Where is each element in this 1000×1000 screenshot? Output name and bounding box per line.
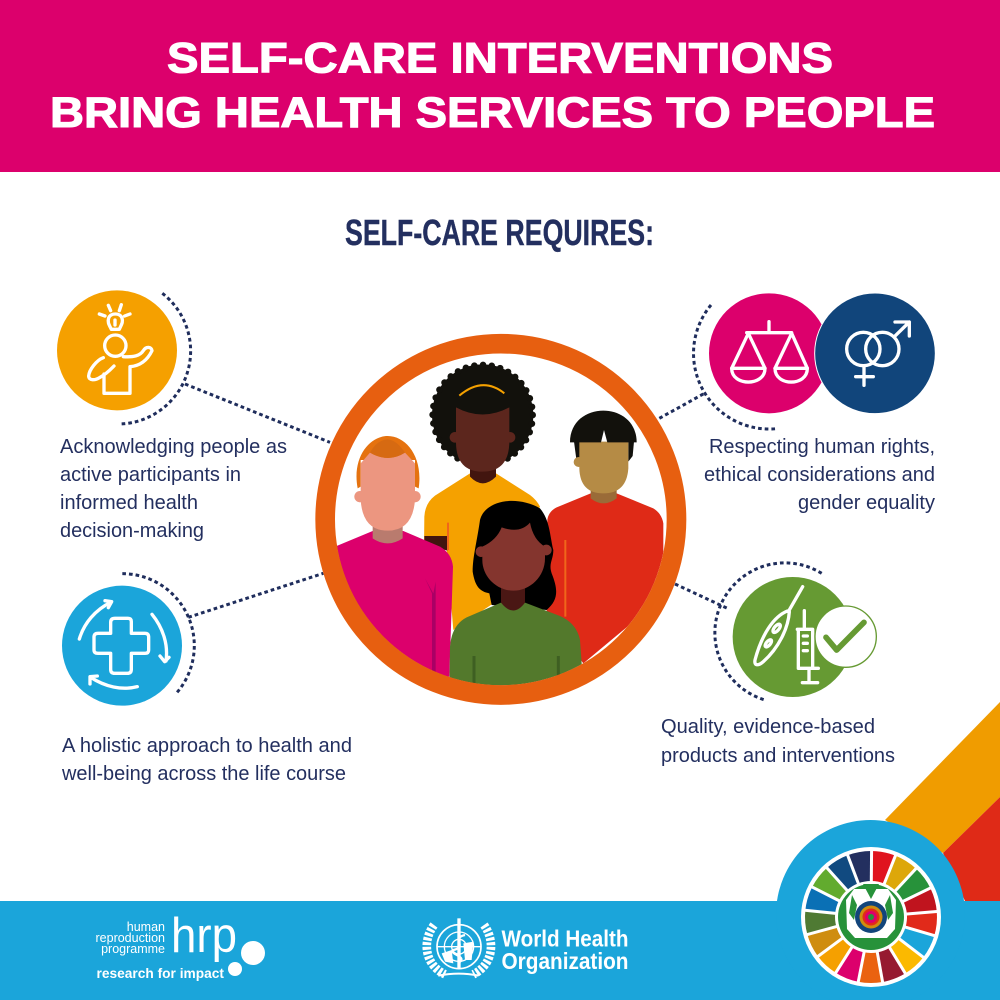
title: SELF-CARE INTERVENTIONS: [167, 36, 833, 82]
subheading: SELF-CARE REQUIRES:: [345, 212, 654, 253]
syringe: [797, 611, 818, 683]
SDG wheel: [799, 845, 943, 989]
orange ring: [325, 344, 676, 695]
footer band: [0, 820, 1000, 1000]
hrp logo: programme: [101, 942, 165, 956]
text: active participants: [60, 436, 287, 542]
text: human rights: Respecting human rights,: [709, 436, 935, 458]
text: human rights: gender equality: [798, 492, 935, 514]
group of four people: [333, 364, 663, 697]
text: holistic approach: A holistic approach to health and: [62, 735, 352, 757]
WHO wordmark: World Health: [502, 926, 628, 952]
text: holistic approach: [61, 735, 352, 785]
text: human rights: ethical considerations and: [704, 464, 935, 486]
text: active participants: informed health: [60, 492, 198, 514]
thermometer: [755, 587, 803, 665]
person: green shirt: [449, 501, 583, 687]
header banner: [0, 0, 1000, 172]
text: active participants: active participants in: [60, 464, 241, 486]
text: human rights: [704, 436, 935, 514]
person: pink shirt: [333, 436, 453, 697]
icon: thermometer, syringe and check with dotted arc: [675, 563, 876, 700]
text: quality products: products and interventions: [661, 745, 895, 767]
text: active participants: Acknowledging people as: [60, 436, 287, 458]
hrp logo: [96, 909, 265, 981]
SDG centre emblem: [838, 884, 904, 950]
icon: scales and gender symbols with dotted arc: [659, 293, 935, 429]
people illustration in orange ring: [325, 344, 676, 697]
title: BRING HEALTH SERVICES TO PEOPLE: [50, 90, 935, 137]
text: quality products: [661, 716, 895, 767]
check badge: [815, 606, 876, 667]
person: red shirt: [547, 411, 663, 663]
scales: [732, 322, 807, 382]
WHO logo: [427, 918, 628, 976]
hrp logo: reproduction: [96, 931, 165, 945]
icon: lightbulb person with dotted arc: [57, 290, 330, 442]
text: quality products: Quality, evidence-based: [661, 716, 875, 738]
text: active participants: decision-making: [60, 520, 204, 542]
person: yellow shirt: [424, 364, 540, 630]
title: [50, 36, 935, 137]
WHO logo: Organization: [502, 948, 628, 974]
icon: medical cross with arrows and dotted arc: [62, 573, 323, 706]
hrp logo: research for impact: [96, 965, 224, 981]
text: holistic approach: well-being across the life course: [61, 763, 346, 785]
gender symbols: [847, 322, 909, 385]
WHO emblem: [427, 918, 491, 976]
hrp logo: human: [127, 920, 165, 934]
stripes: orange and red: [885, 702, 1000, 901]
hrp logo: hrp: [171, 909, 237, 963]
